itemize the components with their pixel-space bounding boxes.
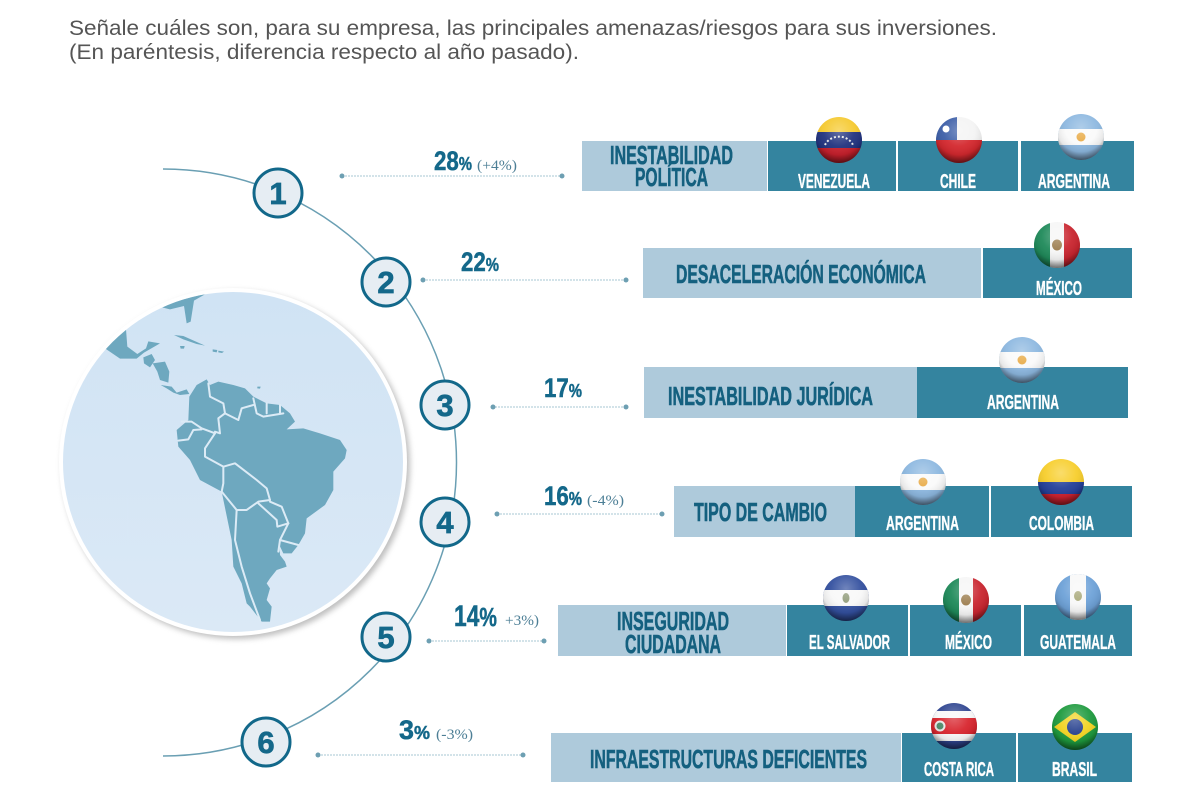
bar row 6: infraestructuras deficientes [551,733,1132,782]
rank badge 5 [362,613,410,661]
flag: Argentina [999,337,1045,383]
globe map of Latin America [59,288,410,639]
row 1 connector and value: (+4%) [477,158,517,174]
rank badge 4 [421,498,469,546]
bar row 5: inseguridad ciudadana: CIUDADANA [625,629,721,659]
bar row 4: tipo de cambio: COLOMBIA [1029,513,1094,535]
rank badge 1: 1 [269,176,287,211]
flag: El Salvador [823,575,869,621]
row 3 connector and value: 17% [544,373,582,403]
bar row 6: infraestructuras deficientes: COSTA RICA [924,759,994,781]
flag: Argentina [900,459,946,505]
bar row 2: desaceleración económica: MÉXICO [1036,277,1082,300]
flag: Costa Rica [931,703,977,749]
row 5 connector and value: +3%) [505,613,539,629]
bar row 4: tipo de cambio: TIPO DE CAMBIO [694,497,827,527]
bar row 1: inestabilidad política: ARGENTINA [1038,171,1110,193]
bar row 3: inestabilidad jurídica: ARGENTINA [987,392,1059,414]
flag: Venezuela [816,117,862,163]
rank badge 3 [421,381,469,429]
row 2 connector and value [420,247,628,282]
flag: Chile [936,117,982,163]
row 1 connector and value: 28% [434,146,472,176]
South America [177,379,347,622]
heading question [69,17,997,64]
flag: Brasil [1052,704,1098,750]
row 4 connector and value: 16% [544,481,582,511]
bar row 3: inestabilidad jurídica [644,367,1128,418]
row 6 connector and value [316,715,526,758]
flag: México [1034,222,1080,268]
row 2 connector and value: 22% [461,247,499,277]
bar row 1: inestabilidad política: INESTABILIDAD [610,140,733,170]
row 5 connector and value: 14% [454,600,497,633]
row 1 connector and value [340,146,564,178]
bar row 6: infraestructuras deficientes: BRASIL [1052,759,1097,781]
row 6 connector and value: (-3%) [436,727,473,743]
flag: Argentina [1058,114,1104,160]
row 5 connector and value [426,600,546,644]
bar row 5: inseguridad ciudadana: MÉXICO [945,631,992,654]
bar row 5: inseguridad ciudadana: GUATEMALA [1040,632,1116,654]
heading question: Señale cuáles son, para su empresa, las principales amenazas/riesgos para sus inversiones. [69,17,997,40]
heading question: (En paréntesis, diferencia respecto al año pasado). [69,41,579,64]
row 6 connector and value: 3% [399,715,430,745]
rank badge 1 [254,169,302,217]
rank badge 2: 2 [377,265,395,300]
bar row 1: inestabilidad política [582,140,1134,193]
bar row 1: inestabilidad política: VENEZUELA [798,171,870,193]
rank badge 4: 4 [436,505,454,540]
North and Central America [105,293,261,395]
bar row 5: inseguridad ciudadana: EL SALVADOR [809,632,890,654]
row 3 connector and value [490,373,628,410]
bar row 2: desaceleración económica [643,248,1132,300]
arc connecting ranking numbers [163,169,456,756]
bar row 3: inestabilidad jurídica: INESTABILIDAD JURÍDICA [668,381,873,411]
rank badge 6 [242,718,290,766]
rank badge 6: 6 [257,725,275,760]
rank badge 3: 3 [436,388,454,423]
flag: México [943,577,989,623]
bar row 6: infraestructuras deficientes: INFRAESTRUCTURAS DEFICIENTES [590,744,867,774]
row 4 connector and value [494,481,664,516]
rank badge 5: 5 [377,620,395,655]
bar row 1: inestabilidad política: CHILE [940,171,976,193]
bar row 4: tipo de cambio [674,486,1132,537]
bar row 2: desaceleración económica: DESACELERACIÓN ECONÓMICA [676,259,926,289]
flag: Guatemala [1055,574,1101,620]
bar row 1: inestabilidad política: POLÍTICA [635,162,708,192]
bar row 5: inseguridad ciudadana [558,605,1132,659]
rank badge 2 [362,258,410,306]
bar row 5: inseguridad ciudadana: INSEGURIDAD [617,606,729,636]
flag: Colombia [1038,459,1084,505]
bar row 4: tipo de cambio: ARGENTINA [886,513,959,535]
row 4 connector and value: (-4%) [587,493,624,509]
